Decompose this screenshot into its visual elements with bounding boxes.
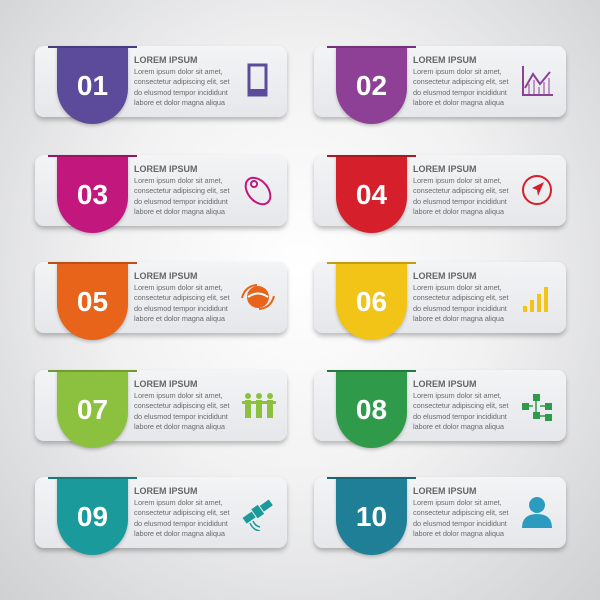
text 01 bbox=[134, 55, 230, 107]
text 08: do elusmod tempor incididunt bbox=[413, 412, 507, 420]
text 10: LOREM IPSUM bbox=[413, 486, 477, 496]
text 05: labore et dolor magna aliqua bbox=[134, 314, 225, 323]
tab 04 bbox=[336, 155, 407, 233]
tab 07 bbox=[57, 370, 128, 448]
card 04 bbox=[314, 155, 566, 226]
text 01: do elusmod tempor incididunt bbox=[134, 88, 228, 96]
card 05 bbox=[35, 262, 287, 333]
tab 02 bbox=[336, 46, 407, 124]
text 09: do elusmod tempor incididunt bbox=[134, 518, 228, 528]
tab 09: 09 bbox=[77, 501, 108, 532]
icon: satellite bbox=[242, 500, 273, 531]
text 02: Lorem ipsum dolor sit amet, bbox=[413, 66, 502, 76]
text 10: labore et dolor magna aliqua bbox=[413, 529, 504, 538]
tab 06 bbox=[336, 262, 407, 340]
icon: compass bbox=[522, 175, 552, 205]
text 07: Lorem ipsum dolor sit amet, bbox=[134, 390, 222, 400]
icon: mouse bbox=[244, 176, 272, 206]
tab 07: 07 bbox=[77, 394, 108, 425]
text 01: Lorem ipsum dolor sit amet, bbox=[134, 66, 222, 76]
text 10: consectetur adipiscing elit, set bbox=[413, 508, 508, 517]
text 01: LOREM IPSUM bbox=[134, 55, 198, 65]
text 08: consectetur adipiscing elit, set bbox=[413, 401, 508, 410]
tab 10 bbox=[336, 477, 407, 555]
text 07: labore et dolor magna aliqua bbox=[134, 422, 225, 431]
text 10: Lorem ipsum dolor sit amet, bbox=[413, 498, 502, 506]
text 08: Lorem ipsum dolor sit amet, bbox=[413, 390, 502, 400]
text 04 bbox=[413, 164, 508, 216]
icon: flowchart bbox=[522, 394, 552, 421]
text 03: LOREM IPSUM bbox=[134, 164, 198, 174]
card 09 bbox=[35, 477, 287, 548]
text 10: do elusmod tempor incididunt bbox=[413, 518, 507, 528]
tab 06: 06 bbox=[356, 286, 387, 317]
text 09: LOREM IPSUM bbox=[134, 486, 198, 496]
tab 08 bbox=[336, 370, 407, 448]
text 02: LOREM IPSUM bbox=[413, 55, 477, 65]
text 03 bbox=[134, 164, 230, 216]
tab 03: 03 bbox=[77, 179, 108, 210]
text 07: consectetur adipiscing elit, set bbox=[134, 401, 229, 410]
text 09 bbox=[134, 486, 230, 538]
text 02: labore et dolor magna aliqua bbox=[413, 98, 504, 107]
text 03: do elusmod tempor incididunt bbox=[134, 196, 228, 206]
text 04: LOREM IPSUM bbox=[413, 164, 477, 174]
card 02 bbox=[314, 46, 566, 117]
text 04: labore et dolor magna aliqua bbox=[413, 207, 504, 216]
icon: phone bbox=[248, 64, 268, 96]
card 08 bbox=[314, 370, 566, 441]
text 05: consectetur adipiscing elit, set bbox=[134, 293, 229, 302]
text 07: do elusmod tempor incididunt bbox=[134, 412, 228, 420]
tab 01 bbox=[57, 46, 128, 124]
icon: refresh globe bbox=[241, 284, 275, 310]
icon: people bbox=[242, 393, 276, 418]
text 01: consectetur adipiscing elit, set bbox=[134, 77, 229, 86]
card 01 bbox=[35, 46, 287, 117]
text 08 bbox=[413, 379, 508, 431]
text 02: do elusmod tempor incididunt bbox=[413, 88, 507, 96]
text 07 bbox=[134, 379, 230, 431]
text 03: labore et dolor magna aliqua bbox=[134, 207, 225, 216]
text 06: consectetur adipiscing elit, set bbox=[413, 293, 508, 302]
icon: user bbox=[522, 497, 552, 528]
text 05: Lorem ipsum dolor sit amet, bbox=[134, 282, 222, 292]
text 06: do elusmod tempor incididunt bbox=[413, 304, 507, 312]
text 09: Lorem ipsum dolor sit amet, bbox=[134, 498, 222, 506]
tab 05 bbox=[57, 262, 128, 340]
text 02: consectetur adipiscing elit, set bbox=[413, 77, 508, 86]
text 03: Lorem ipsum dolor sit amet, bbox=[134, 176, 222, 184]
tab 02: 02 bbox=[356, 70, 387, 101]
text 02 bbox=[413, 55, 508, 107]
text 05 bbox=[134, 271, 230, 323]
text 01: labore et dolor magna aliqua bbox=[134, 98, 225, 107]
tab 09 bbox=[57, 477, 128, 555]
tab 01: 01 bbox=[77, 70, 108, 101]
text 08: labore et dolor magna aliqua bbox=[413, 422, 504, 431]
text 10 bbox=[413, 486, 508, 538]
text 09: labore et dolor magna aliqua bbox=[134, 529, 225, 538]
text 05: do elusmod tempor incididunt bbox=[134, 304, 228, 312]
text 04: do elusmod tempor incididunt bbox=[413, 196, 507, 206]
text 04: consectetur adipiscing elit, set bbox=[413, 186, 508, 195]
text 06: LOREM IPSUM bbox=[413, 271, 477, 281]
card 10 bbox=[314, 477, 566, 548]
card 03 bbox=[35, 155, 287, 226]
text 07: LOREM IPSUM bbox=[134, 379, 198, 389]
card 06 bbox=[314, 262, 566, 333]
tab 10: 10 bbox=[356, 501, 387, 532]
text 06: Lorem ipsum dolor sit amet, bbox=[413, 282, 502, 292]
card 07 bbox=[35, 370, 287, 441]
tab 04: 04 bbox=[356, 179, 387, 210]
icon: chart bbox=[522, 66, 553, 96]
text 09: consectetur adipiscing elit, set bbox=[134, 508, 229, 517]
text 08: LOREM IPSUM bbox=[413, 379, 477, 389]
tab 08: 08 bbox=[356, 394, 387, 425]
text 06: labore et dolor magna aliqua bbox=[413, 314, 504, 323]
tab 03 bbox=[57, 155, 128, 233]
icon: signal bars bbox=[523, 287, 548, 312]
text 05: LOREM IPSUM bbox=[134, 271, 198, 281]
tab 05: 05 bbox=[77, 286, 108, 317]
text 06 bbox=[413, 271, 508, 323]
text 03: consectetur adipiscing elit, set bbox=[134, 186, 229, 195]
text 04: Lorem ipsum dolor sit amet, bbox=[413, 176, 502, 184]
